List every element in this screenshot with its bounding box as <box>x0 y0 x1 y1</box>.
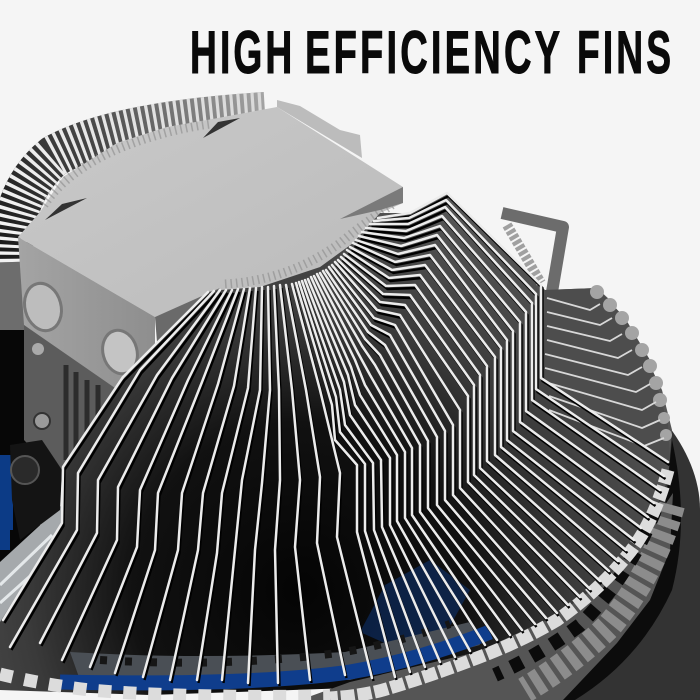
rear radial fins disc <box>12 113 265 262</box>
rivet right <box>98 326 142 378</box>
title: FINS <box>577 19 674 86</box>
bottom clips row <box>0 470 668 698</box>
highlighted fins <box>3 193 668 683</box>
black fan housing <box>540 420 700 700</box>
metal clip handle <box>502 213 563 292</box>
fin shadows <box>4 196 670 686</box>
left dark interior with blue fan <box>0 245 62 625</box>
lower fin stack <box>300 493 673 700</box>
bright stack edge <box>507 225 541 283</box>
fin texture near rear hub <box>44 124 210 205</box>
top slot left <box>45 198 87 220</box>
right lamella shading <box>545 288 670 460</box>
title: HIGH <box>190 19 295 86</box>
blue fan glimpse <box>360 560 470 650</box>
title: EFFICIENCY <box>305 19 563 86</box>
fin ends beside corner <box>155 288 220 342</box>
rivet left <box>19 279 67 335</box>
block right edge stripes <box>340 187 403 219</box>
heat sink block <box>18 100 403 395</box>
block top face <box>18 107 403 317</box>
right lamella lines <box>545 298 664 446</box>
white fin tabs <box>330 470 668 698</box>
rim teeth <box>590 285 672 441</box>
block rear wall <box>277 100 362 158</box>
mounting screw <box>10 440 62 540</box>
housing inner ring <box>545 440 681 700</box>
fin texture near hub <box>225 203 395 284</box>
block front face <box>18 237 155 395</box>
title <box>190 19 674 86</box>
top slot rear <box>203 118 240 138</box>
main fin body <box>0 193 672 695</box>
mounting plate <box>24 325 115 480</box>
